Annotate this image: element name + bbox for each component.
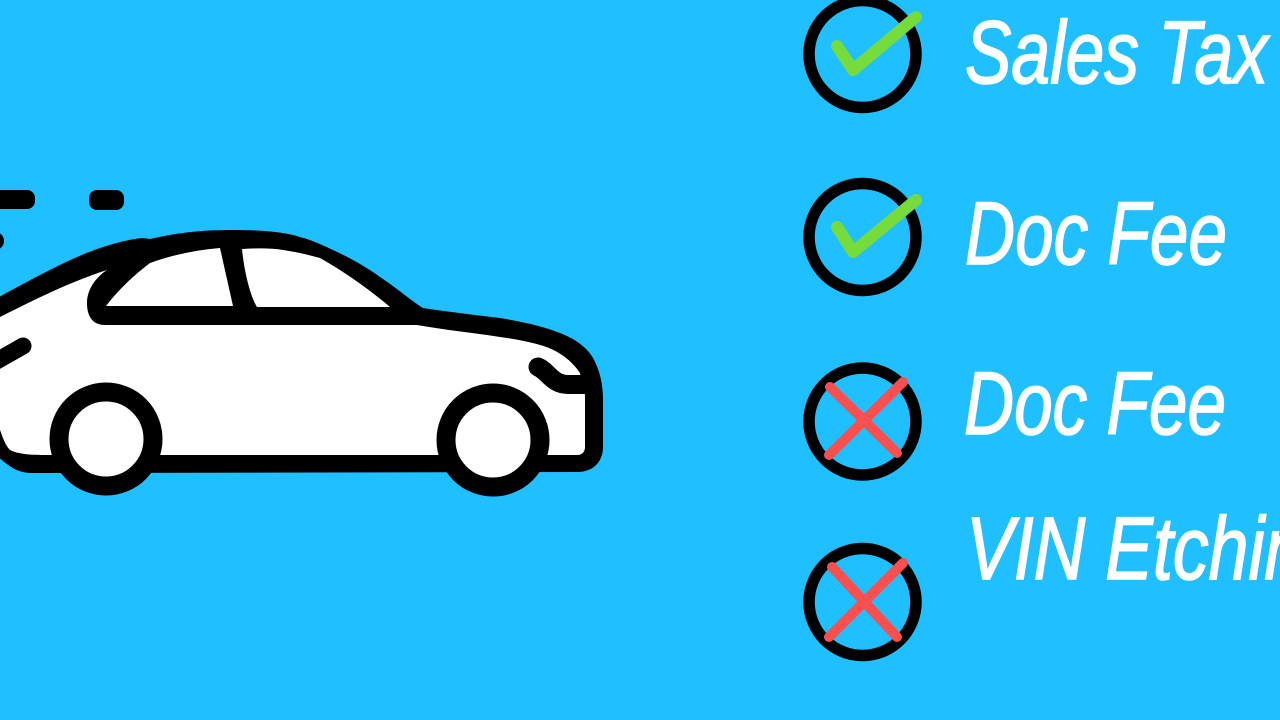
- icon: car: [0, 190, 603, 487]
- icon: cross: [809, 368, 916, 475]
- car outline: [0, 230, 603, 473]
- rear wheel: [446, 393, 540, 487]
- icon: check: [809, 0, 916, 108]
- checklist item: Doc Fee crossed: [809, 353, 1226, 475]
- front window: [242, 248, 390, 307]
- door handle: [0, 346, 23, 366]
- checklist item: Sales Tax: [809, 0, 1271, 108]
- front wheel: [59, 392, 153, 486]
- checklist item: VIN Etching: [809, 498, 1280, 656]
- checklist item: Doc Fee: [809, 183, 1227, 290]
- car body: [0, 270, 585, 455]
- speed dashes: [0, 190, 124, 250]
- icon: cross: [809, 548, 916, 656]
- rear window: [106, 248, 233, 306]
- headlight: [538, 367, 592, 384]
- icon: check: [809, 184, 916, 290]
